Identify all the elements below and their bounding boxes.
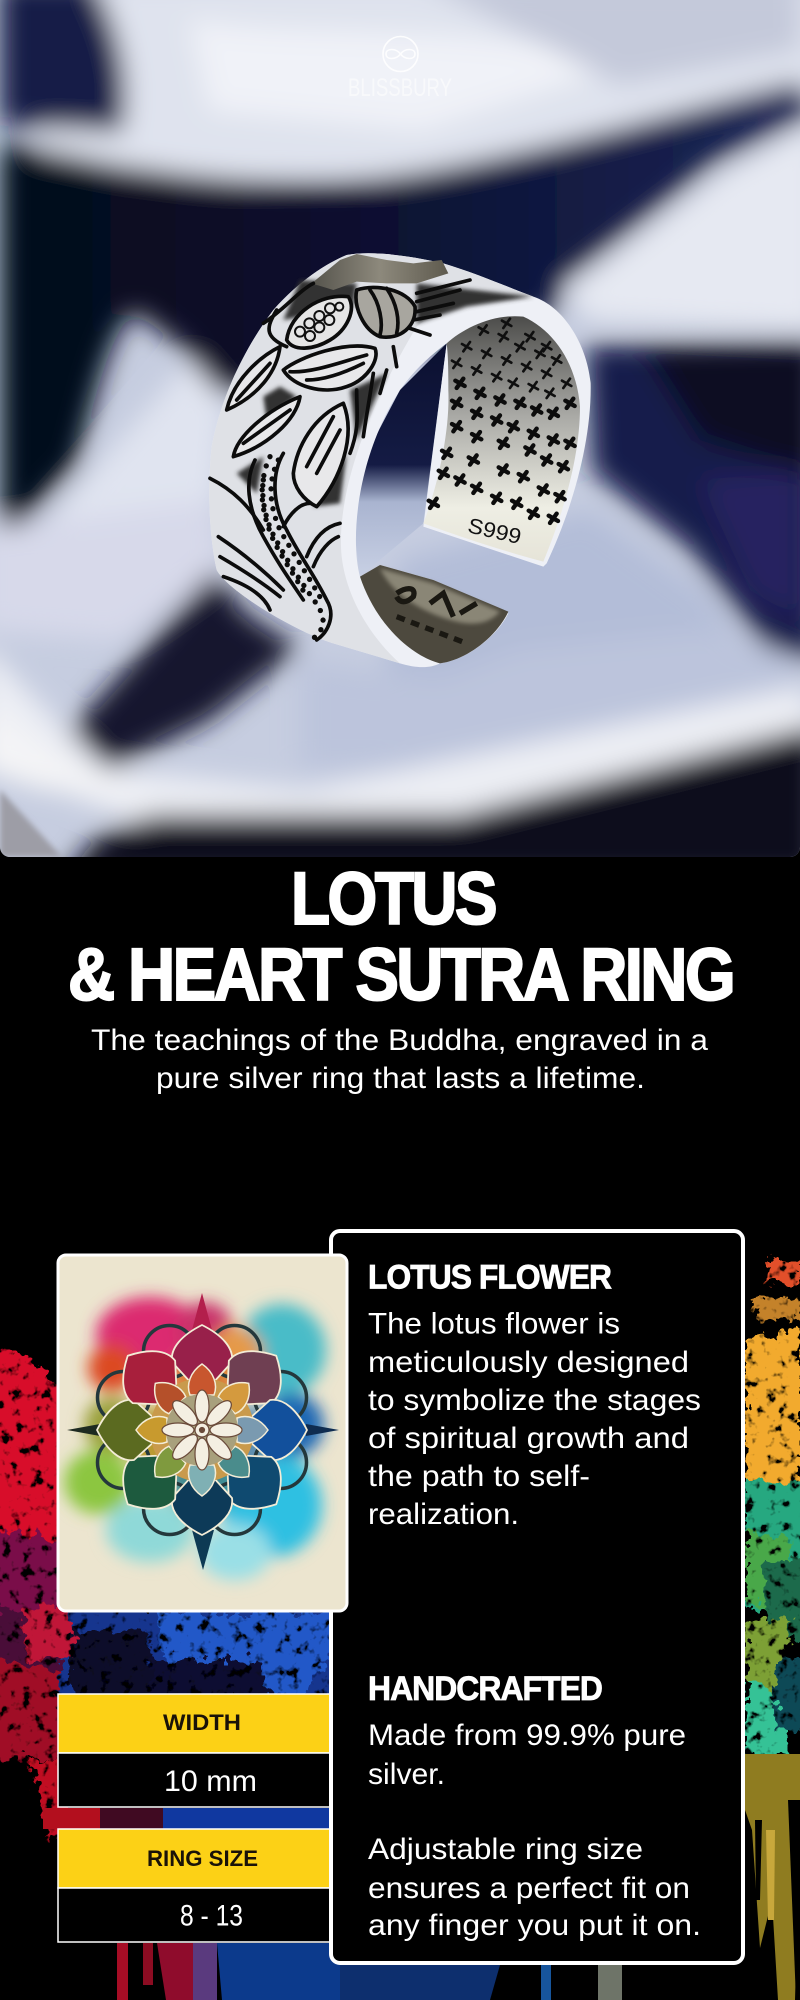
lotus flower description: to symbolize the stages — [368, 1384, 701, 1417]
central flower — [162, 1390, 242, 1470]
brand logo — [356, 36, 450, 90]
feature card — [331, 1231, 743, 1963]
handcrafted description: Adjustable ring size — [368, 1833, 643, 1866]
title line 1: LOTUS — [291, 857, 496, 940]
width value: 10 mm — [164, 1765, 257, 1798]
width value — [58, 1753, 330, 1807]
lower inner surface — [360, 565, 508, 663]
lotus pod and petals — [210, 280, 470, 640]
sutra engraving upper rows — [452, 319, 571, 398]
engraved outer face — [209, 253, 533, 663]
lotus flower description: realization. — [368, 1498, 519, 1531]
middle petal ring — [136, 1364, 268, 1496]
handcrafted description — [368, 1719, 701, 1942]
lotus mandala artwork — [58, 1255, 347, 1611]
lotus top bump — [312, 254, 448, 290]
large petals — [97, 1325, 307, 1535]
spec table — [58, 1694, 330, 1942]
sutra engraving lower rows — [429, 379, 575, 523]
strip between spec rows — [43, 1808, 330, 1829]
ring size label — [58, 1829, 330, 1888]
right paint column — [745, 1258, 800, 2000]
handcrafted description: any finger you put it on. — [368, 1909, 701, 1942]
handcrafted description: Made from 99.9% pure — [368, 1719, 686, 1752]
paint splash background — [0, 1258, 800, 2000]
pod seeds — [295, 303, 343, 341]
lotus flower description: of spiritual growth and — [368, 1422, 689, 1455]
hero photo: silver ring on navy and white fabric — [0, 0, 800, 880]
lotus flower description — [368, 1308, 701, 1531]
watercolor washes — [64, 1297, 326, 1580]
handcrafted description: ensures a perfect fit on — [368, 1872, 690, 1905]
dotted stem — [262, 457, 323, 638]
brand name: BLISSBURY — [348, 74, 452, 102]
ring size value: 8 - 13 — [180, 1900, 243, 1932]
subtitle: The teachings of the Buddha, engraved in a — [91, 1024, 708, 1057]
ring size label: RING SIZE — [147, 1846, 258, 1871]
ring — [209, 253, 591, 667]
right rim — [413, 296, 591, 567]
ring size value — [58, 1888, 330, 1942]
width label: WIDTH — [163, 1710, 241, 1735]
spikes — [67, 1293, 339, 1570]
subtitle — [91, 1024, 708, 1095]
lotus flower description: The lotus flower is — [368, 1308, 620, 1340]
logo badge — [383, 36, 418, 72]
heading: handcrafted: HANDCRAFTED — [368, 1670, 602, 1708]
lotus flower description: the path to self- — [368, 1460, 590, 1493]
subtitle: pure silver ring that lasts a lifetime. — [156, 1062, 645, 1095]
handcrafted description: silver. — [368, 1758, 445, 1791]
S999 hallmark: S999 — [466, 513, 524, 549]
ring body — [209, 253, 533, 667]
heading: lotus flower: LOTUS FLOWER — [368, 1258, 611, 1296]
shaded relief — [237, 280, 533, 507]
product title — [68, 857, 733, 1016]
centre blue splash — [20, 1605, 335, 1700]
bottom drips — [117, 1943, 622, 2000]
left red splash — [0, 1348, 70, 1838]
inner engraved surface — [423, 316, 580, 562]
title line 2: & HEART SUTRA RING — [68, 933, 733, 1016]
background seen through the ring — [356, 344, 446, 552]
width label — [58, 1694, 330, 1753]
lotus flower description: meticulously designed — [368, 1346, 689, 1379]
fabric background — [0, 0, 800, 880]
outer ring lobes — [98, 1326, 306, 1534]
